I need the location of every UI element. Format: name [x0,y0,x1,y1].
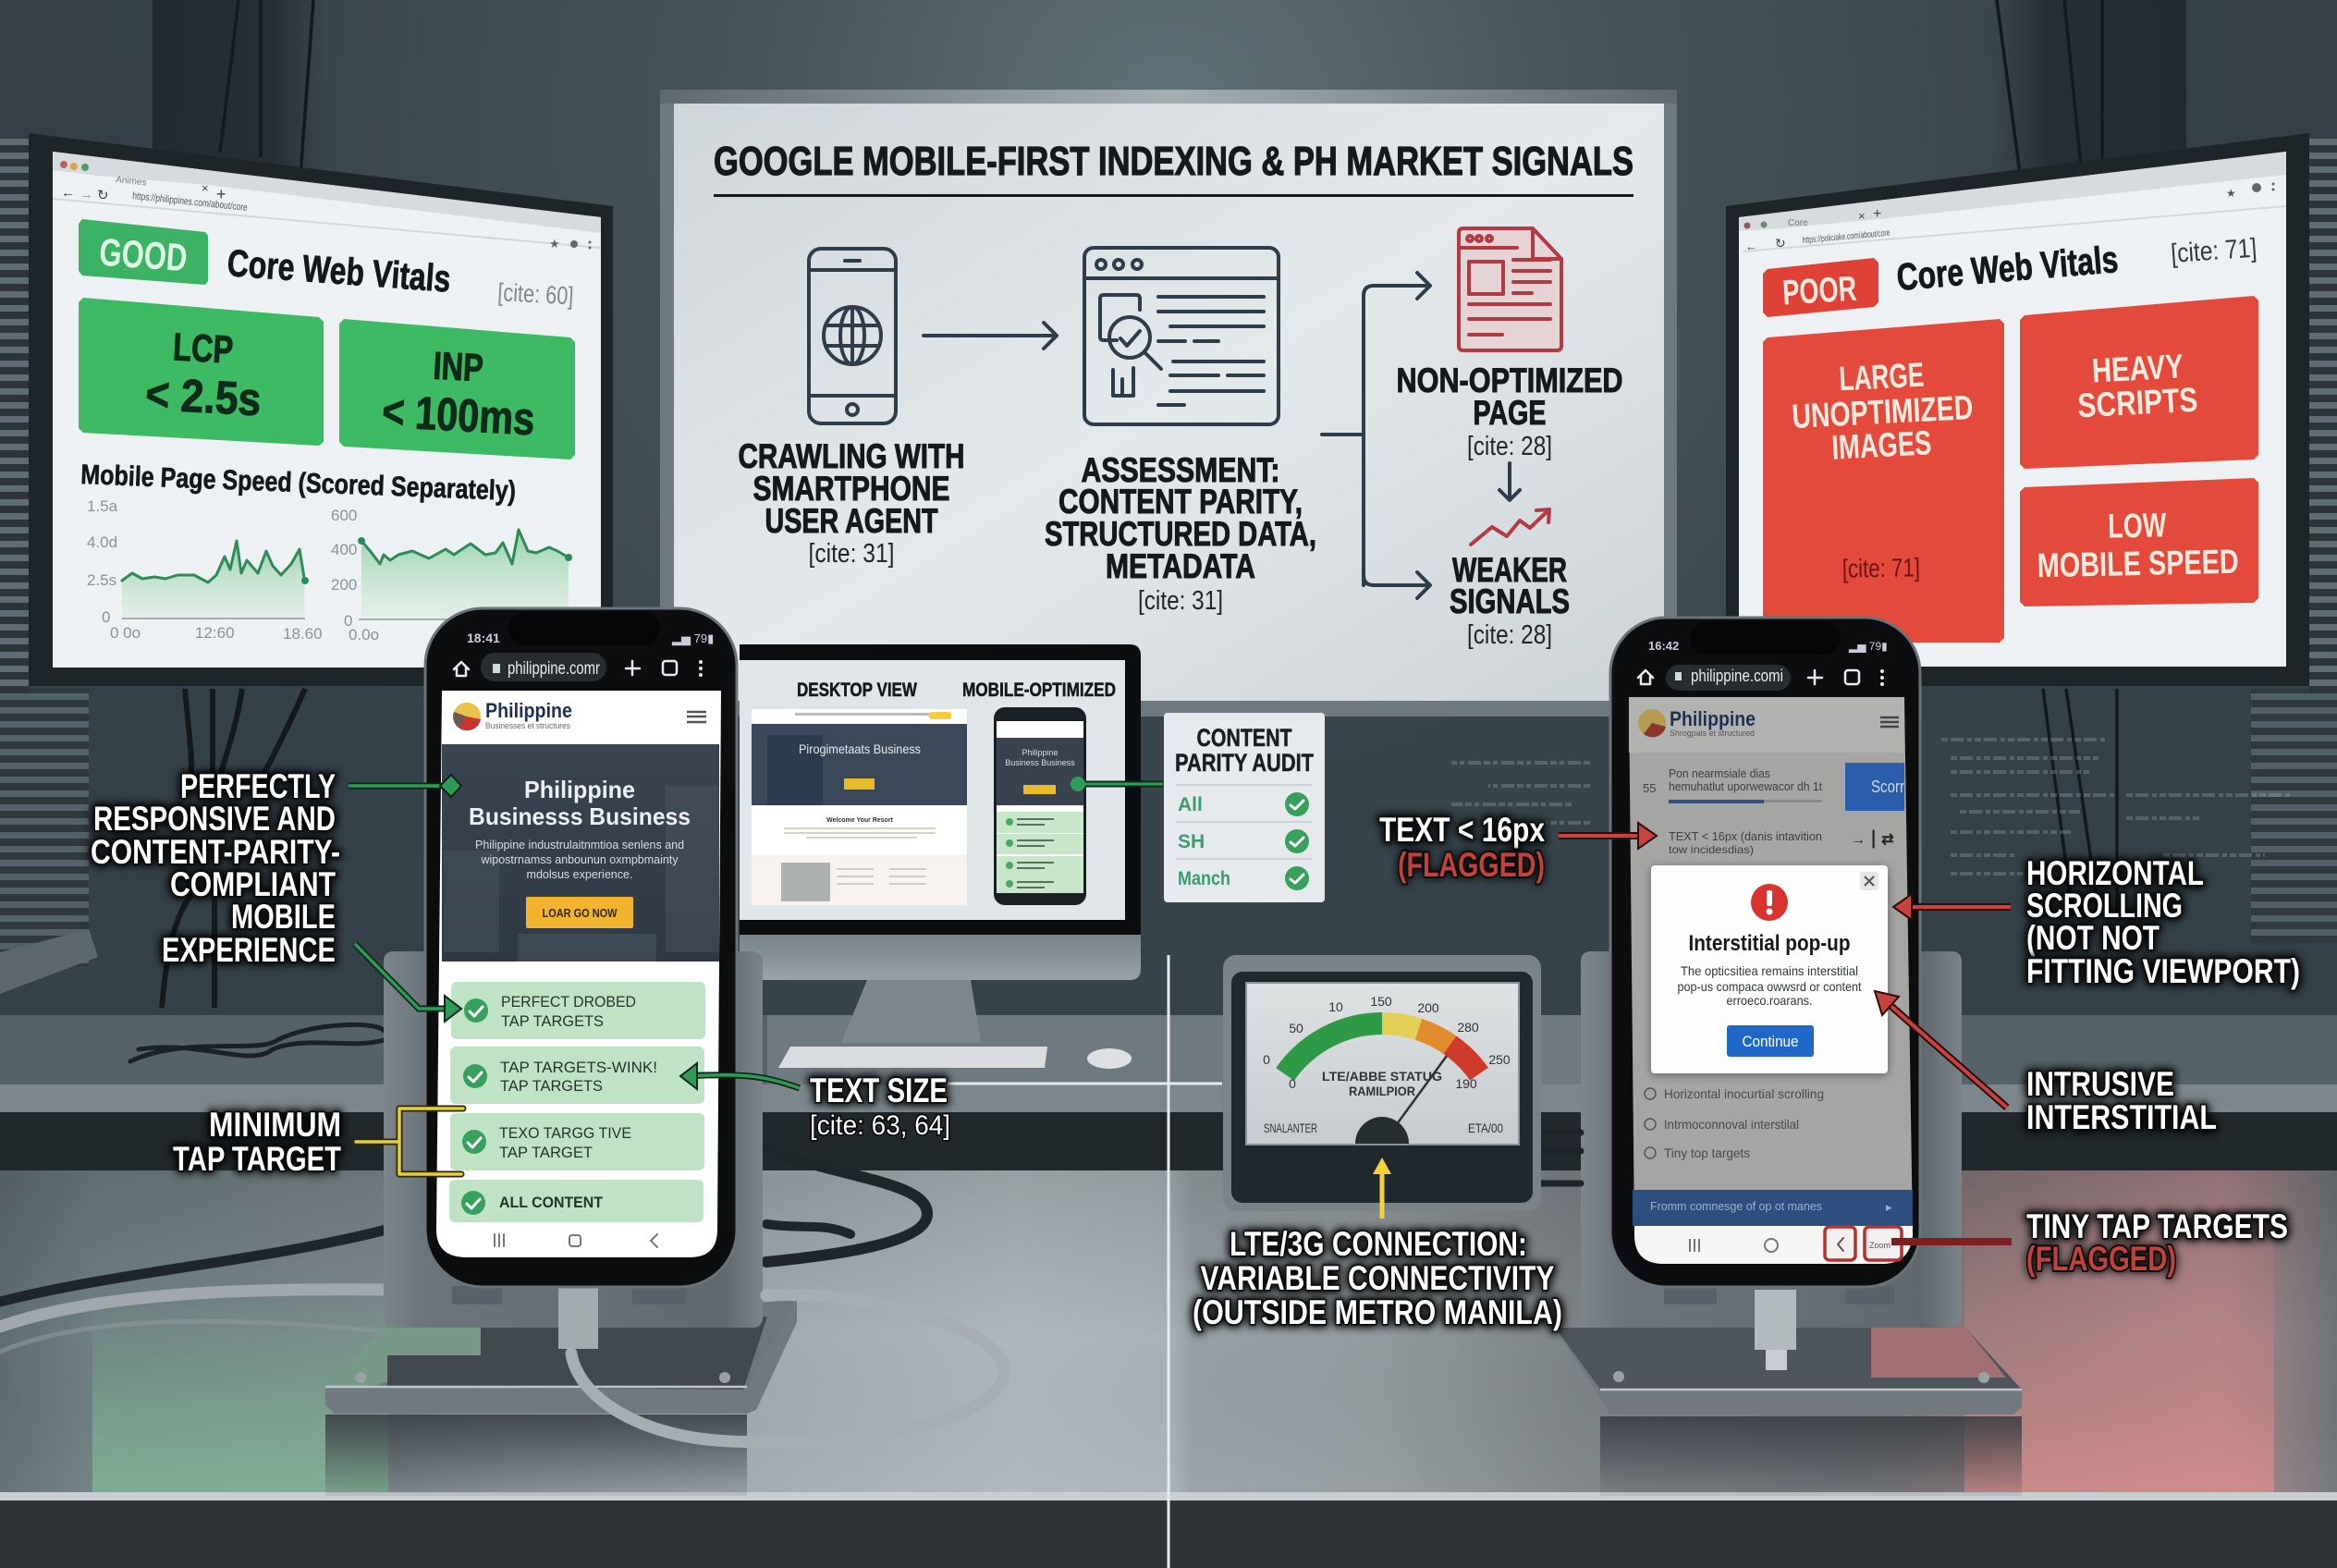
chart: left speed line: 18.60 [283,625,323,643]
browser chrome: ← [1745,239,1757,253]
card: large images: UNOPTIMIZED [1791,388,1974,435]
hero: Philippine [524,776,635,803]
site header: Shrogpals et structured [1670,729,1755,738]
code wall text [1451,740,2293,874]
card: INP: < 100ms [381,386,536,445]
tiny text block: 55 [1643,781,1656,795]
badge: poor: POOR [1781,270,1857,312]
card: low mobile speed: LOW [2108,506,2167,545]
citation: [cite: 60] [497,278,574,310]
headers: MOBILE-OPTIMIZED [962,680,1116,701]
chart: right speed line: 0 [344,612,352,630]
gauge labels: 280 [1457,1020,1479,1035]
callout: perfectly responsive: COMPLIANT [170,865,336,903]
callout: tiny tap targets [1891,1207,2288,1278]
dark wall column right [1988,0,2186,222]
flagged list: Intrmoconnoval interstilal [1664,1117,1799,1132]
audit rows: All [1178,794,1203,815]
text: assessment: CONTENT PARITY, [1058,483,1303,521]
desk surface [0,1170,2337,1568]
callout: tiny tap targets: (FLAGGED) [2026,1240,2176,1278]
card: LCP: < 2.5s [144,368,263,425]
card: heavy scripts: SCRIPTS [2076,381,2198,424]
keyboard [778,1047,1047,1068]
chart: left speed line: 0 [102,608,110,626]
window blinds right upper [2309,139,2337,693]
callout: perfectly responsive: MOBILE [231,898,336,936]
desktop page preview: Welcome Your Resort [826,817,894,824]
overflowing button: → ⎮ ⇄ [1851,829,1894,849]
callout: minimum tap target: MINIMUM [209,1106,341,1144]
text: non-optimized page: NON-OPTIMIZED [1396,361,1623,399]
callout: horizontal scrolling: (NOT NOT [2026,919,2160,957]
android nav [495,1234,657,1247]
grey cable [0,1290,385,1352]
overflowing button [1845,763,1904,849]
status and browser bar [454,612,714,681]
browser chrome: ★ [549,237,560,251]
icon: red signal zigzag [1471,509,1549,545]
tap target rows: TAP TARGET [499,1144,593,1161]
panel: right monitor poor core web vitals [1726,133,2309,686]
text: non-optimized page [1396,361,1623,461]
browser chrome: ★ [2226,187,2236,200]
status and browser bar: ▂▅ 79▮ [1848,640,1888,653]
gauge labels: RAMILPIOR [1349,1084,1415,1098]
audit rows [1178,794,1230,889]
icon: assessment browser window [1084,248,1279,424]
hamburger [687,712,706,722]
stand pillar [1581,951,1962,1328]
tiny text block: TEXT < 16px (danis intavition [1669,829,1822,843]
status and browser bar [1638,621,1888,691]
card: LCP [79,298,324,446]
hero: Philippine industrulaitnmtioa senlens and [475,838,684,851]
interstitial pop-up: Continue [1742,1033,1799,1050]
heading: mobile page speed: Mobile Page Speed (Scored Separately) [80,459,517,507]
gauge labels: 200 [1417,1000,1439,1015]
android nav with flagged tap targets: Zoom [1869,1241,1890,1250]
gauge needle [1387,1056,1447,1138]
text: non-optimized page: [cite: 28] [1467,432,1552,461]
window blinds left upper [0,139,29,693]
tap target rows: TAP TARGETS [500,1077,603,1095]
callout: horizontal scrolling: SCROLLING [2026,887,2183,925]
text: crawling: USER AGENT [765,502,938,540]
panel: content parity audit: PARITY AUDIT [1175,749,1314,777]
browser chrome: → [80,187,93,202]
tiny text block: Pon nearmsiale dias [1669,766,1770,780]
callout: minimum tap target: TAP TARGET [173,1140,341,1178]
card: heavy scripts: HEAVY [2091,347,2184,390]
text: crawling [738,437,965,569]
arrow: to hero [349,775,461,797]
overflowing button: Scorr [1871,778,1904,796]
callout: perfectly responsive: EXPERIENCE [162,931,336,969]
callout: minimum tap target [173,1106,463,1178]
audit rows: SH [1178,831,1205,852]
page screen [436,691,721,1257]
gauge labels: 0 [1289,1076,1296,1091]
callout: connectivity: VARIABLE CONNECTIVITY [1200,1259,1555,1297]
text: weaker signals: [cite: 28] [1467,620,1552,650]
text: crawling: CRAWLING WITH [738,437,965,475]
tap target rows: PERFECT DROBED [501,993,636,1011]
site header [1629,697,1904,753]
gauge arc [1285,1023,1479,1074]
callout: intrusive interstitial [1875,991,2217,1136]
text: assessment: STRUCTURED DATA, [1045,515,1316,553]
gauge labels: LTE/ABBE STATUG [1322,1069,1442,1084]
callout: text under 16px flagged: (FLAGGED) [1398,846,1545,884]
chart: left speed line: 12:60 [195,624,235,642]
site name [485,699,572,730]
tap target rows: TAP TARGETS [501,1012,604,1030]
gauge labels: 250 [1488,1052,1511,1067]
hero: LOAR GO NOW [542,906,618,920]
status and browser bar: ▂▅ 79▮ [671,631,714,646]
callout: perfectly responsive: CONTENT-PARITY- [91,833,340,871]
card: heavy scripts [2020,296,2258,469]
stand base plate [325,1300,797,1414]
icon: smartphone with globe [809,249,896,423]
status and browser bar: philippine.comi [1691,667,1783,685]
arrow: to tap rows [355,944,461,1022]
status and browser bar: philippine.comr [508,659,601,679]
cable bundle on shelf [130,1024,384,1061]
card: low mobile speed: MOBILE SPEED [2037,543,2239,584]
chart: right speed line: 400 [331,541,357,558]
callout: intrusive interstitial: INTRUSIVE [2026,1065,2174,1103]
callout: perfectly responsive [91,767,461,1022]
card: large images: IMAGES [1830,423,1932,467]
callout: text under 16px flagged: TEXT < 16px [1379,811,1545,849]
mobile page preview [994,707,1086,905]
monitor stand [841,980,981,1043]
hero: wipostrnamss anbounun oxmpbmainty [481,852,679,866]
arrow: down [1499,463,1520,500]
card: LCP: LCP [172,325,234,372]
browser chrome: ↻ [1775,236,1786,251]
tap target rows: ALL CONTENT [499,1194,604,1211]
chart: left speed line: 2.5s [87,571,116,589]
site name: Businesses et structures [485,721,570,730]
yellow bracket [356,1109,463,1174]
text: assessment [1045,451,1316,616]
page screen [1629,697,1913,1264]
browser chrome: ← [61,185,75,201]
flagged list [1645,1086,1824,1160]
chart: left speed line: 1.5a [87,497,118,515]
chart: right speed line [331,507,572,643]
arrow: red to small text [1559,823,1657,849]
panel: desktop monitor comparison [740,644,1141,1069]
interstitial pop-up: erroeco.roarans. [1727,993,1812,1008]
arrow: green to row [680,1063,800,1089]
right phone stand [1555,951,2022,1496]
callout: text size [680,1063,950,1141]
gauge labels: ETA/00 [1468,1121,1503,1135]
chart: left speed line [87,497,323,643]
blue bar: ▸ [1886,1200,1892,1214]
citation: [cite: 71] [2170,234,2257,269]
phone: poor mobile experience [1610,618,1920,1287]
gauge labels: 50 [1289,1021,1303,1035]
browser chrome: × [1858,209,1866,223]
left phone stand and cables [0,951,1004,1496]
desktop page preview: Pirogimetaats Business [799,741,921,756]
browser chrome: + [216,185,226,203]
text: crawling: [cite: 31] [808,539,895,569]
dark cables [0,1150,927,1302]
browser chrome: https://policiake.com/about/core [1802,228,1890,246]
window blinds left lower [0,689,98,994]
browser chrome [60,161,592,251]
badge: good: GOOD [98,230,189,279]
site name: Philippine [485,699,572,722]
panel: connectivity gauge [1223,955,1581,1219]
dark wall column left [153,0,328,222]
gauge labels: 10 [1328,999,1343,1014]
gauge labels [1263,994,1511,1135]
browser chrome [1744,183,2274,253]
chart: right speed line: 200 [331,576,357,594]
callout: text size: [cite: 63, 64] [810,1110,950,1141]
callout: perfectly responsive: PERFECTLY [180,767,336,805]
status and browser bar: 18:41 [467,631,500,645]
chart: left speed line: 4.0d [87,533,117,551]
heading: core web vitals: Core Web Vitals [226,241,452,300]
hero [442,744,719,962]
gauge labels: 0 [1263,1052,1270,1067]
stand base plate [1555,1328,2022,1415]
card: INP: INP [433,344,484,389]
site header: Philippine [1670,707,1756,730]
flagged list: Tiny top targets [1664,1145,1750,1160]
arrow: yellow to gauge [1373,1158,1391,1219]
arrow: red to buttons [1891,1238,2012,1245]
android nav with flagged tap targets [1634,1226,1913,1264]
callout: text under 16px flagged [1379,811,1657,884]
gauge labels: SNALANTER [1264,1121,1317,1135]
charging plug [558,1288,598,1349]
mobile page preview: Philippine [1022,748,1058,757]
gauge labels: 150 [1370,994,1392,1009]
central whiteboard panel [660,90,1677,717]
card: low mobile speed [2020,478,2258,606]
phone: good mobile experience [425,608,737,1287]
text: weaker signals [1450,551,1570,650]
callout: text size: TEXT SIZE [810,1072,948,1109]
browser chrome: + [1873,206,1881,222]
arrow: crawl to assessment [924,323,1057,349]
headers: DESKTOP VIEW [797,680,917,701]
hero: mdolsus experience. [527,867,632,881]
mobile page preview: Business Business [1005,758,1075,767]
card: large images [1763,319,2004,643]
card: INP [339,319,575,459]
heading: core web vitals: Core Web Vitals [1895,238,2120,299]
badge: poor [1763,258,1878,317]
branch arrows [1322,273,1430,598]
callout: horizontal scrolling: HORIZONTAL [2026,854,2204,892]
panel: content parity audit [1071,713,1325,902]
panel: content parity audit: CONTENT [1196,724,1292,752]
browser chrome: ↻ [97,188,109,203]
callout: intrusive interstitial: INTERSTITIAL [2026,1098,2217,1136]
callout: connectivity: LTE/3G CONNECTION: [1230,1225,1527,1263]
cradle feet [1664,1286,1894,1305]
callout: connectivity: (OUTSIDE METRO MANILA) [1193,1293,1562,1331]
card: large images: [cite: 71] [1842,553,1920,583]
text: weaker signals: WEAKER [1452,551,1567,589]
tap target rows: TEXO TARGG TIVE [499,1124,631,1142]
interstitial pop-up: pop-us compaca owwsrd or content [1677,979,1862,994]
text: assessment: ASSESSMENT: [1082,451,1279,489]
browser chrome: Core [1788,218,1808,228]
cradle feet [452,1286,686,1305]
text: non-optimized page: PAGE [1474,394,1546,432]
audit check icons [1285,792,1309,890]
white charging cable [571,1294,1004,1442]
arrow: red to phone edge [1893,894,2011,920]
status and browser bar: 16:42 [1648,639,1679,653]
text: assessment: [cite: 31] [1138,586,1223,616]
text: assessment: METADATA [1106,547,1255,585]
browser chrome: https://philippines.com/about/core [132,190,248,214]
hero: Businesss Business [469,802,691,830]
browser chrome: Animes [116,175,147,188]
logo [453,703,481,730]
chart: right speed line: 0.0o [349,626,379,643]
gauge labels: 190 [1455,1076,1477,1091]
callout: horizontal scrolling [1893,854,2300,990]
charging plug [1755,1290,1796,1370]
tap target rows: TAP TARGETS-WINK! [500,1059,657,1076]
tap target rows [449,982,705,1222]
title: GOOGLE MOBILE-FIRST INDEXING & PH MARKET SIGNALS [714,139,1633,184]
text: weaker signals: SIGNALS [1450,582,1570,620]
icon: red non-optimized page [1459,228,1561,350]
hanging cables [162,0,2117,1008]
interstitial pop-up: The opticsitiea remains interstitial [1681,963,1858,978]
flagged list: Horizontal inocurtial scrolling [1664,1086,1824,1101]
shelf: back wall ledge [0,1015,2337,1173]
callout: connectivity [1193,1225,1562,1331]
divider line [948,955,1222,1568]
blue bar: Fromm comnesge of op ot manes [1650,1199,1822,1213]
arrow: red to popup [1875,991,2007,1108]
chart: right speed line: 600 [331,507,357,524]
tiny text block: tow incidesdias) [1669,843,1754,856]
browser chrome: × [202,181,209,195]
interstitial pop-up [1651,865,1888,1073]
mouse [1087,1048,1132,1069]
badge: good [79,219,208,285]
stand pillar [384,951,763,1328]
callout: perfectly responsive: RESPONSIVE AND [93,800,336,838]
tiny text block [1643,766,1822,856]
desktop page preview [752,709,967,905]
blue bar [1633,1190,1913,1226]
audit rows: Manch [1178,868,1230,889]
tiny text block: hemuhatlut uporwewacor dh 1t [1669,779,1822,793]
window blinds right lower [2251,689,2337,943]
panel: left monitor good core web vitals [29,133,613,686]
text: crawling: SMARTPHONE [752,470,950,508]
chart: left speed line: 0 0o [110,624,141,642]
card: large images: LARGE [1838,356,1925,398]
interstitial pop-up: Interstitial pop-up [1688,931,1851,956]
headers [797,680,1116,701]
